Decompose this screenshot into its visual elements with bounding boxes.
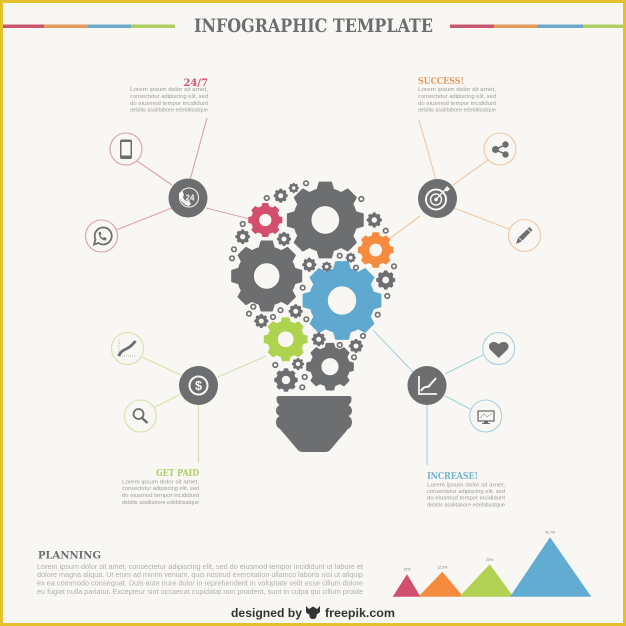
icon: dollar node: $ — [195, 379, 202, 393]
light bulb made of gears — [230, 181, 396, 452]
gear: red — [249, 203, 282, 237]
triangle orange — [418, 566, 463, 597]
icon: heart — [483, 332, 515, 364]
text block get paid: debitis asalitabore edebitisatque — [122, 500, 199, 506]
right colour bar — [450, 24, 623, 28]
panel: planning — [37, 550, 363, 596]
small grey gears — [236, 183, 395, 391]
icon: freepik crown — [306, 606, 320, 619]
icon: 24 hour call node: 24 — [186, 194, 195, 202]
text block get paid: do eiusmod tempor incididunt — [122, 493, 200, 499]
text block increase: do eiusmod tempor incididunt — [427, 496, 506, 502]
panel: get paid connector group — [112, 332, 266, 506]
triangle chart — [393, 530, 591, 597]
text block increase — [427, 482, 506, 508]
freepik credit: designed by — [231, 606, 302, 620]
text block success: do eiusmod tempor incididunt — [418, 101, 497, 107]
text block get paid — [122, 480, 200, 506]
gear: big grey left — [232, 241, 302, 311]
heading planning: PLANNING — [38, 550, 101, 562]
connector lines red — [116, 118, 250, 230]
icon: dollar node — [179, 366, 218, 405]
small grey rings — [230, 181, 396, 390]
planning text block: dolore magna aliqua. Ut enim ad minim veniam, quis nostrud exercitation ullamco laboris nisi ut aliquip — [37, 570, 363, 579]
heading 24/7: 24/7 — [183, 78, 208, 89]
freepik credit: freepik.com — [325, 606, 395, 620]
title: INFOGRAPHIC TEMPLATE — [194, 15, 433, 37]
icon: target node — [418, 179, 457, 218]
gear: green — [264, 318, 307, 361]
triangle red: 15% — [403, 568, 411, 572]
bulb base — [276, 396, 352, 452]
icon: rising chart node — [408, 366, 446, 405]
icon: share — [484, 133, 516, 165]
triangle blue: 41.7% — [545, 530, 556, 534]
text block increase: consectetur adipiscing elit, sed — [427, 489, 505, 495]
heading get paid: GET PAID — [156, 468, 199, 479]
panel: success connector group — [388, 76, 540, 252]
text block success: consectetur adipiscing elit, sed — [418, 94, 496, 100]
panel: increase connector group — [372, 329, 515, 508]
triangle red — [393, 568, 420, 597]
gear: big grey top — [287, 182, 363, 258]
text block success: debitis asalitabore edebitisatque — [418, 108, 496, 114]
gear: grey lower — [307, 343, 353, 390]
gear: big blue — [303, 262, 381, 339]
triangle green — [459, 558, 513, 597]
text block success: Lorem ipsum dolor sit amet, — [418, 87, 496, 93]
icon: pencil — [508, 220, 540, 252]
text block get paid: Lorem ipsum dolor sit amet, — [122, 480, 199, 486]
text block increase: Lorem ipsum dolor sit amet, — [427, 482, 505, 488]
text block 24/7: debitis asalitabore edebitisatque — [130, 108, 208, 114]
icon: monitor — [470, 400, 502, 432]
text block get paid: consectetur adipiscing elit, sed — [122, 486, 199, 492]
heading increase: INCREASE! — [427, 471, 478, 482]
panel: 24/7 connector group — [86, 78, 250, 252]
triangle orange: 12.5% — [437, 566, 448, 570]
text block 24/7: consectetur adipiscing elit, sed — [130, 94, 208, 100]
planning text block — [37, 562, 363, 596]
text block 24/7: do eiusmod tempor incididunt — [130, 101, 209, 107]
connector lines orange — [388, 120, 509, 240]
freepik credit — [231, 606, 395, 620]
blue gear halo — [299, 258, 385, 344]
icon: whatsapp — [86, 220, 118, 252]
gear: orange — [358, 232, 393, 268]
triangle green: 25% — [486, 558, 494, 562]
planning text block: Lorem ipsum dolor sit amet, consectetur adipiscing elit, sed do eiusmod tempor incididunt ut labore et — [37, 562, 363, 571]
planning text block: ex ea commodo consequat. Duis aute irure dolor in reprehenderit in voluptate velit esse cillum dolore — [37, 578, 363, 588]
triangle blue — [510, 530, 591, 597]
text block 24/7 — [130, 87, 209, 114]
text block success — [418, 87, 497, 114]
icon: line chart — [112, 332, 144, 364]
text block 24/7: Lorem ipsum dolor sit amet, — [130, 87, 208, 93]
icon: phone — [110, 133, 142, 165]
icon: 24 hour call node — [168, 178, 208, 218]
connector lines blue — [372, 329, 483, 465]
planning text block: eu fugiat nulla pariatur. Excepteur sint occaecat cupidatat non proident, sunt in culpa qui cillum proide — [37, 587, 363, 596]
left colour bar — [3, 24, 175, 28]
connector lines green — [142, 356, 266, 463]
heading success: SUCCESS! — [418, 76, 464, 87]
icon: magnifier — [124, 400, 156, 432]
text block increase: debitis asalitabore edebitisatque — [427, 502, 505, 508]
